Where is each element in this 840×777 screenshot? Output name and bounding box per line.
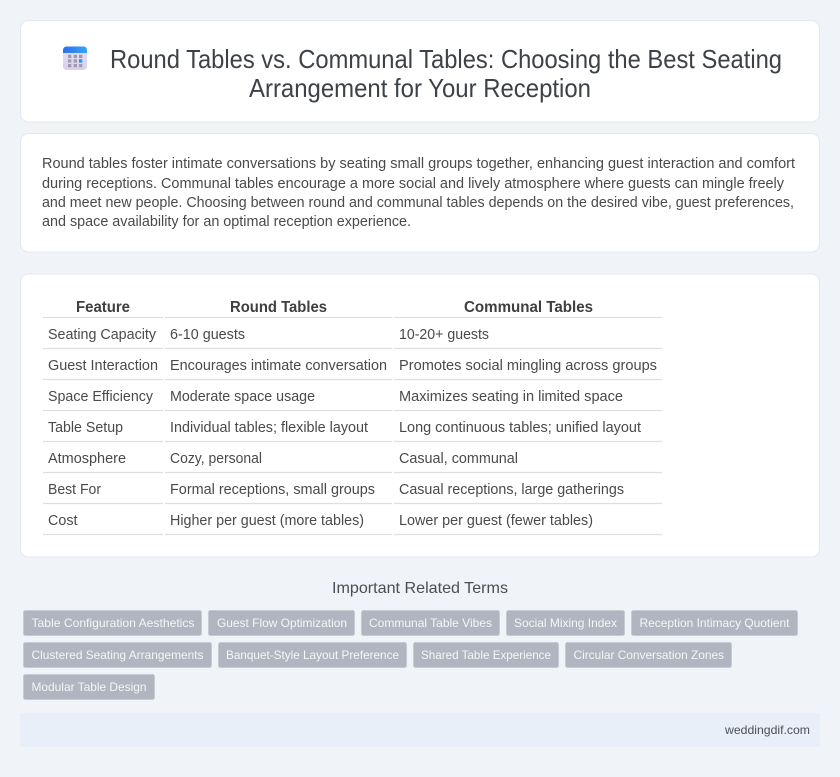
- row: best for: Best For: [48, 482, 101, 498]
- title text: Arrangement for Your Reception: [249, 75, 591, 103]
- tag: [24, 610, 202, 636]
- row: space efficiency: Space Efficiency: [48, 389, 154, 405]
- tag: Modular Table Design: [32, 680, 146, 694]
- title text: [110, 46, 782, 103]
- row: table setup: Table Setup: [48, 420, 123, 436]
- tag: Guest Flow Optimization: [217, 616, 347, 630]
- row: atmosphere: Casual, communal: [399, 451, 518, 467]
- row: cost: Lower per guest (fewer tables): [399, 513, 593, 529]
- intro text: Round tables foster intimate conversations by seating small groups together, enhancing guest interaction and comfort: [42, 156, 795, 172]
- row: seating capacity: 10-20+ guests: [399, 327, 489, 343]
- row: seating capacity: 6-10 guests: [170, 327, 245, 343]
- table header: Feature: [76, 299, 130, 316]
- row: best for: Casual receptions, large gatherings: [399, 482, 624, 498]
- row: table setup: Individual tables; flexible layout: [170, 420, 368, 436]
- row: guest interaction: Promotes social mingling across groups: [399, 358, 657, 374]
- row: table setup: [48, 420, 641, 436]
- row: space efficiency: [48, 389, 623, 405]
- related term tags: [24, 610, 798, 700]
- tag: [414, 642, 558, 668]
- tag: [24, 642, 212, 668]
- panel: introduction: [20, 134, 820, 252]
- intro text: [42, 156, 795, 230]
- table header: Communal Tables: [464, 299, 593, 316]
- tag: [632, 610, 798, 636]
- tag: Circular Conversation Zones: [574, 648, 724, 662]
- row: cost: Higher per guest (more tables): [170, 513, 364, 529]
- tag: Communal Table Vibes: [369, 616, 492, 630]
- tag: [218, 642, 406, 668]
- title text: Round Tables vs. Communal Tables: Choosing the Best Seating: [110, 46, 782, 74]
- heading: important related terms: Important Related Terms: [332, 580, 508, 597]
- row: seating capacity: [48, 327, 489, 343]
- tag: [24, 674, 154, 700]
- table header: [76, 299, 593, 316]
- footer: [20, 713, 820, 747]
- row: guest interaction: [48, 358, 657, 374]
- icon: calendar: [63, 46, 87, 70]
- row: atmosphere: Atmosphere: [48, 451, 126, 467]
- row: atmosphere: Cozy, personal: [170, 451, 262, 467]
- intro text: and meet new people. Choosing between round and communal tables depends on the desired vibe, guest preferences,: [42, 195, 794, 211]
- row: guest interaction: Encourages intimate conversation: [170, 358, 387, 374]
- tag: [506, 610, 624, 636]
- table header: Round Tables: [230, 299, 327, 316]
- tag: [566, 642, 732, 668]
- row: atmosphere: [48, 451, 518, 467]
- row: table setup: Long continuous tables; unified layout: [399, 420, 641, 436]
- tag: Social Mixing Index: [514, 616, 617, 630]
- tag: Clustered Seating Arrangements: [32, 648, 204, 662]
- row: guest interaction: Guest Interaction: [48, 358, 158, 374]
- row: best for: Formal receptions, small groups: [170, 482, 375, 498]
- intro text: during receptions. Communal tables encourage a more social and lively atmosphere where guests can mingle freely: [42, 176, 785, 192]
- tag: [208, 610, 354, 636]
- footer: weddingdif.com: [724, 723, 810, 737]
- row: cost: [48, 513, 593, 529]
- tag: Banquet-Style Layout Preference: [226, 648, 399, 662]
- tag: Reception Intimacy Quotient: [640, 616, 790, 630]
- row: space efficiency: Maximizes seating in limited space: [399, 389, 623, 405]
- tag: Table Configuration Aesthetics: [32, 616, 195, 630]
- panel: title: [20, 20, 820, 122]
- tag: Shared Table Experience: [421, 648, 551, 662]
- row: best for: [48, 482, 624, 498]
- panel: comparison table: [20, 274, 820, 557]
- row: seating capacity: Seating Capacity: [48, 327, 157, 343]
- tag: [362, 610, 500, 636]
- row: cost: Cost: [48, 513, 78, 529]
- intro text: and space availability for an optimal reception experience.: [42, 214, 411, 230]
- row: space efficiency: Moderate space usage: [170, 389, 315, 405]
